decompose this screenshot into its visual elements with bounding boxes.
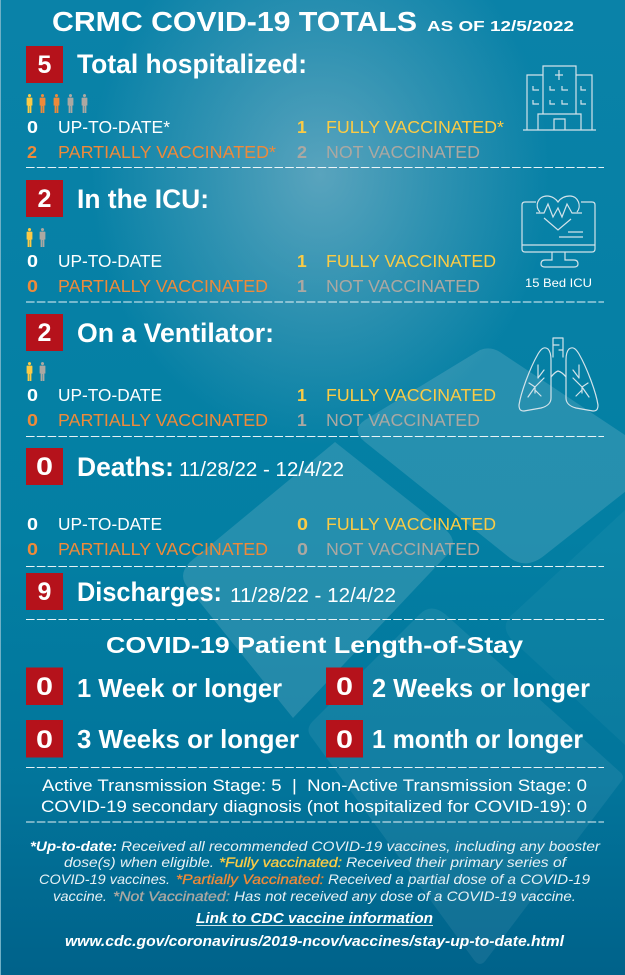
count badge: 0: 0 bbox=[36, 453, 53, 481]
title: CRMC COVID-19 TOTALS bbox=[52, 6, 417, 37]
stat: 2 weeks or longer: 0 bbox=[336, 673, 353, 701]
link URL: www.cdc.gov/coronavirus/2019-ncov/vaccines/stay-up-to-date.html bbox=[65, 933, 565, 950]
panel: deaths bbox=[26, 448, 496, 559]
vaccination breakdown: NOT VACCINATED bbox=[326, 276, 480, 296]
footnote: vaccination definitions: Received their primary series of bbox=[346, 854, 568, 870]
panel: on a ventilator bbox=[26, 314, 598, 430]
vaccination breakdown: NOT VACCINATED bbox=[326, 539, 480, 559]
count badge: 9: 9 bbox=[38, 578, 51, 606]
label: 15 bed ICU: 15 Bed ICU bbox=[525, 276, 592, 290]
pictogram: five patients bbox=[27, 94, 87, 113]
vaccination breakdown: 1 bbox=[297, 251, 307, 271]
transmission stage summary: Active Transmission Stage: 5 | Non-Active Transmission Stage: 0 bbox=[42, 777, 587, 795]
vaccination breakdown: FULLY VACCINATED bbox=[326, 251, 496, 271]
vaccination breakdown: 0 bbox=[27, 539, 38, 559]
heading: in the ICU: In the ICU: bbox=[77, 184, 209, 214]
title: AS OF 12/5/2022 bbox=[427, 18, 574, 35]
panel: discharges bbox=[26, 573, 396, 610]
transmission stage summary bbox=[41, 777, 587, 816]
icon: ICU monitor with heart bbox=[522, 196, 595, 267]
panel: patient length of stay bbox=[26, 632, 590, 758]
panel: in the ICU bbox=[26, 180, 595, 296]
count badge: 2 bbox=[26, 180, 63, 217]
vaccination breakdown: UP-TO-DATE bbox=[58, 514, 162, 534]
vaccination breakdown: NOT VACCINATED bbox=[326, 142, 480, 162]
vaccination breakdown: 2 bbox=[27, 142, 37, 162]
vaccination breakdown: 2 bbox=[297, 142, 307, 162]
heading: length of stay: COVID-19 Patient Length-of-Stay bbox=[106, 632, 523, 658]
count badge: 5: 5 bbox=[38, 51, 52, 79]
panel: total hospitalized bbox=[26, 46, 596, 162]
heading: total hospitalized: Total hospitalized: bbox=[77, 49, 307, 79]
count badge: 2: 2 bbox=[38, 185, 51, 213]
footnote: vaccination definitions: *Fully vaccinated: bbox=[219, 854, 342, 870]
footnote: vaccination definitions bbox=[30, 838, 601, 904]
stat: 2 weeks or longer bbox=[326, 668, 590, 705]
stat: 1 month or longer bbox=[326, 720, 583, 758]
vaccination breakdown: 0 bbox=[27, 410, 38, 430]
vaccination breakdown: 0 bbox=[27, 117, 38, 137]
count badge: 2: 2 bbox=[38, 319, 51, 347]
vaccination breakdown: FULLY VACCINATED bbox=[326, 514, 496, 534]
vaccination breakdown: 0 bbox=[27, 514, 38, 534]
vaccination breakdown: NOT VACCINATED bbox=[326, 410, 480, 430]
icon: lungs bbox=[519, 338, 598, 411]
footnote: vaccination definitions: Received a partial dose of a COVID-19 bbox=[328, 871, 590, 887]
title bbox=[52, 6, 574, 37]
date range: 11/28/22 - 12/4/22 bbox=[179, 459, 344, 481]
vaccination breakdown: FULLY VACCINATED bbox=[326, 385, 496, 405]
footnote: vaccination definitions: dose(s) when eligible. bbox=[64, 854, 214, 870]
footnote: vaccination definitions: *Partially Vaccinated: bbox=[176, 871, 324, 887]
pictogram: two patients bbox=[27, 228, 45, 247]
stat: 3 weeks or longer: 3 Weeks or longer bbox=[77, 724, 299, 754]
footnote: vaccination definitions: Has not received any dose of a COVID-19 vaccine. bbox=[234, 888, 576, 904]
vaccination breakdown: 1 bbox=[297, 276, 307, 296]
vaccination breakdown: PARTIALLY VACCINATED bbox=[58, 539, 268, 559]
vaccination breakdown: 0 bbox=[27, 276, 38, 296]
heading: deaths: Deaths: bbox=[77, 452, 174, 482]
stat: 1 month or longer: 0 bbox=[336, 726, 353, 754]
footnote: vaccination definitions: Received all recommended COVID-19 vaccines, including any booster bbox=[121, 838, 601, 854]
vaccination breakdown: 0 bbox=[27, 251, 38, 271]
date range: 11/28/22 - 12/4/22 bbox=[230, 585, 396, 607]
count badge: 2 bbox=[26, 314, 63, 351]
vaccination breakdown: 1 bbox=[297, 385, 307, 405]
vaccination breakdown: 0 bbox=[27, 385, 38, 405]
count badge: 0 bbox=[26, 448, 63, 485]
vaccination breakdown: PARTIALLY VACCINATED bbox=[58, 276, 268, 296]
vaccination breakdown bbox=[27, 385, 496, 430]
icon: hospital bbox=[523, 66, 596, 130]
vaccination breakdown: PARTIALLY VACCINATED bbox=[58, 410, 268, 430]
pictogram: two patients bbox=[27, 362, 45, 381]
heading: on a ventilator: On a Ventilator: bbox=[77, 318, 274, 348]
vaccination breakdown: PARTIALLY VACCINATED* bbox=[58, 142, 276, 162]
footnote: vaccination definitions: COVID-19 vaccines. bbox=[39, 871, 170, 887]
footnote: vaccination definitions: *Not Vaccinated: bbox=[113, 888, 230, 904]
vaccination breakdown: 1 bbox=[297, 410, 307, 430]
heading: discharges: Discharges: bbox=[77, 577, 222, 607]
vaccination breakdown: FULLY VACCINATED* bbox=[326, 117, 504, 137]
vaccination breakdown: UP-TO-DATE bbox=[58, 251, 162, 271]
stat: 3 weeks or longer bbox=[26, 720, 299, 758]
stat: 1 week or longer: 1 Week or longer bbox=[77, 673, 282, 703]
stat: 2 weeks or longer: 2 Weeks or longer bbox=[372, 673, 590, 703]
vaccination breakdown: 1 bbox=[297, 117, 307, 137]
vaccination breakdown bbox=[27, 251, 496, 296]
count badge: 9 bbox=[26, 573, 63, 610]
footnote: vaccination definitions: *Up-to-date: bbox=[30, 838, 117, 854]
stat: 1 month or longer: 1 month or longer bbox=[372, 724, 583, 754]
footnote: vaccination definitions: vaccine. bbox=[53, 888, 107, 904]
transmission stage summary: COVID-19 secondary diagnosis (not hospitalized for COVID-19): 0 bbox=[41, 798, 587, 816]
stat: 1 week or longer: 0 bbox=[36, 673, 53, 701]
vaccination breakdown bbox=[27, 117, 504, 162]
vaccination breakdown: UP-TO-DATE bbox=[58, 385, 162, 405]
vaccination breakdown bbox=[27, 514, 496, 559]
vaccination breakdown: UP-TO-DATE* bbox=[58, 117, 170, 137]
stat: 3 weeks or longer: 0 bbox=[36, 726, 53, 754]
vaccination breakdown: 0 bbox=[297, 539, 308, 559]
stat: 1 week or longer bbox=[26, 668, 282, 705]
vaccination breakdown: 0 bbox=[297, 514, 308, 534]
count badge: 5 bbox=[26, 46, 63, 83]
link heading: CDC vaccine information: Link to CDC vaccine information bbox=[196, 910, 433, 927]
